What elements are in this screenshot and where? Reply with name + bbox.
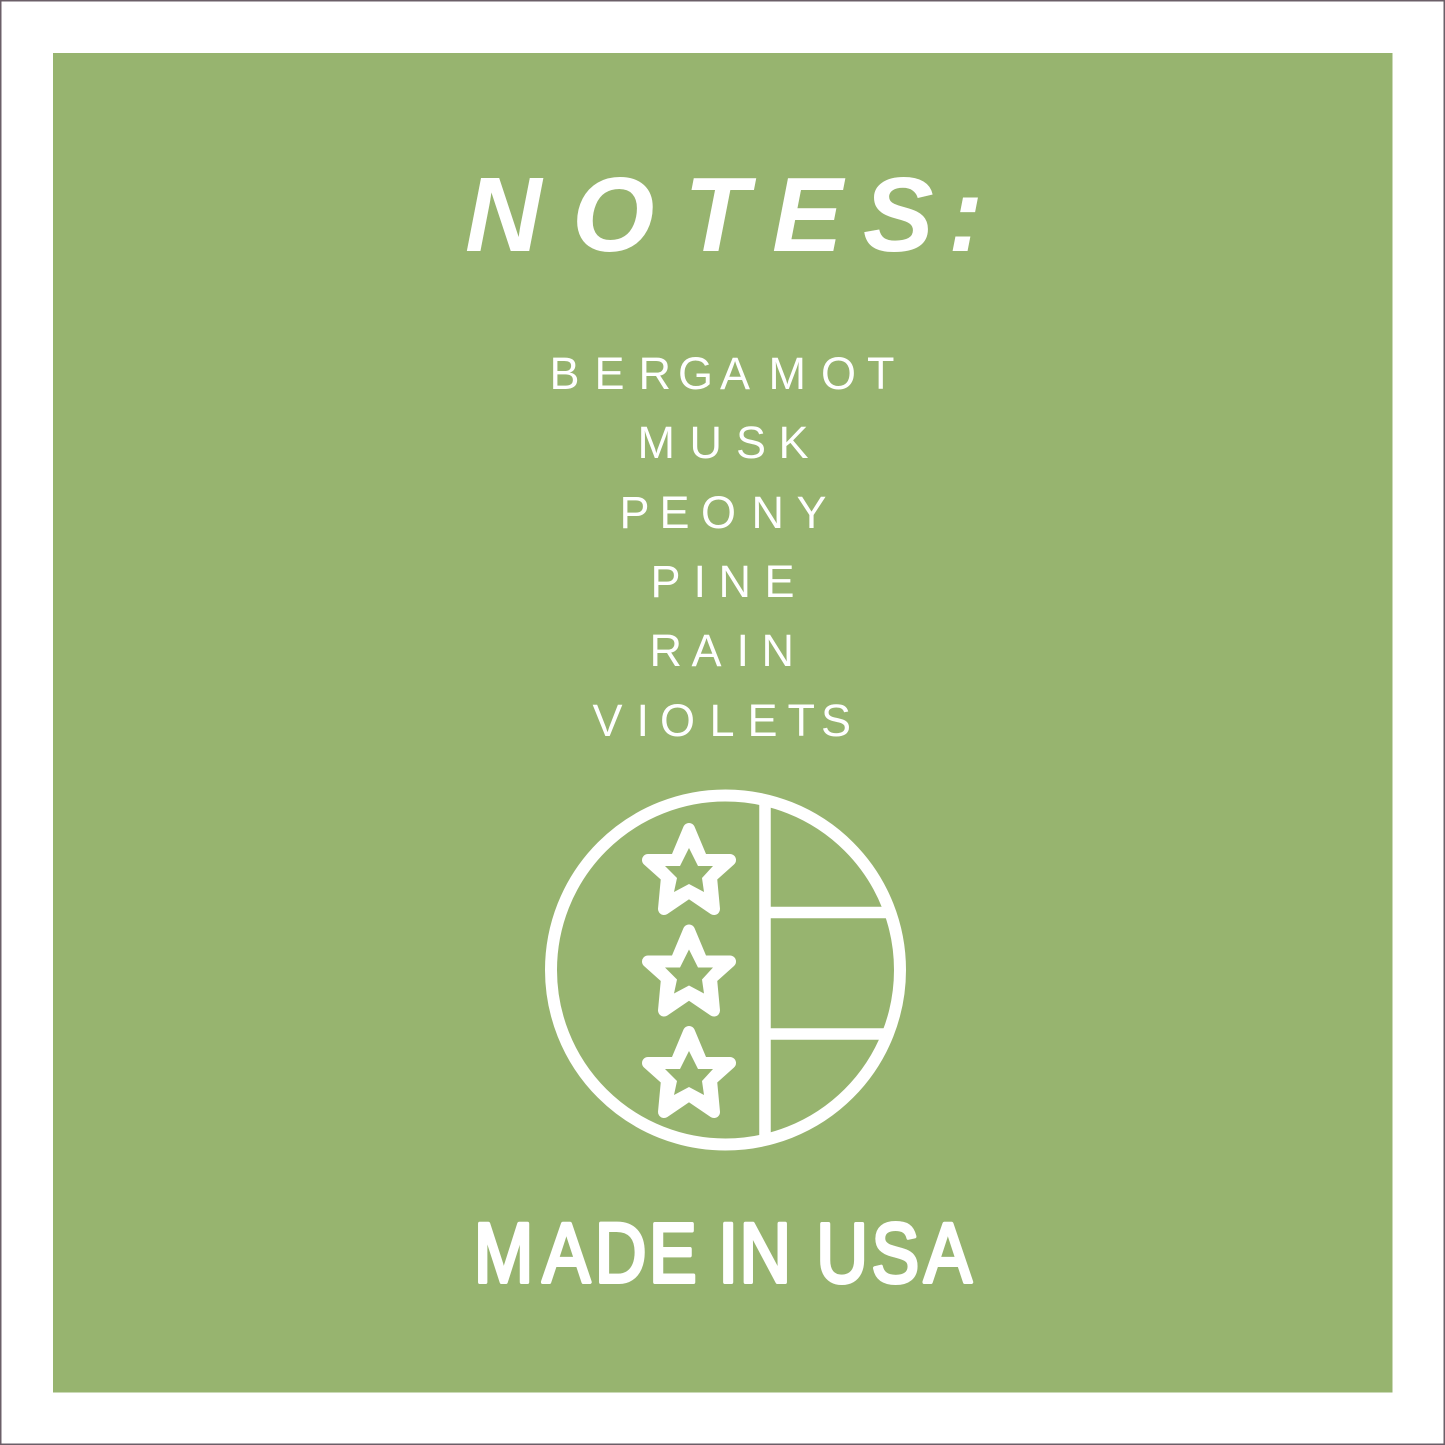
note: rain: RAIN bbox=[650, 625, 794, 676]
note: peony: PEONY bbox=[620, 487, 827, 538]
icon: bottom star bbox=[648, 1032, 730, 1112]
note: bergamot: BERGAMOT bbox=[550, 348, 894, 399]
caption: made in USA: MADE IN USA bbox=[474, 1205, 972, 1300]
icon: round USA flag with three stars bbox=[551, 796, 900, 1144]
icon: middle star bbox=[648, 930, 730, 1010]
note: violets: VIOLETS bbox=[592, 695, 851, 746]
note: musk: MUSK bbox=[638, 417, 809, 468]
list of scent notes bbox=[550, 348, 894, 746]
icon: top star bbox=[648, 829, 730, 909]
note: pine: PINE bbox=[650, 556, 795, 607]
title: NOTES: NOTES: bbox=[465, 156, 983, 274]
